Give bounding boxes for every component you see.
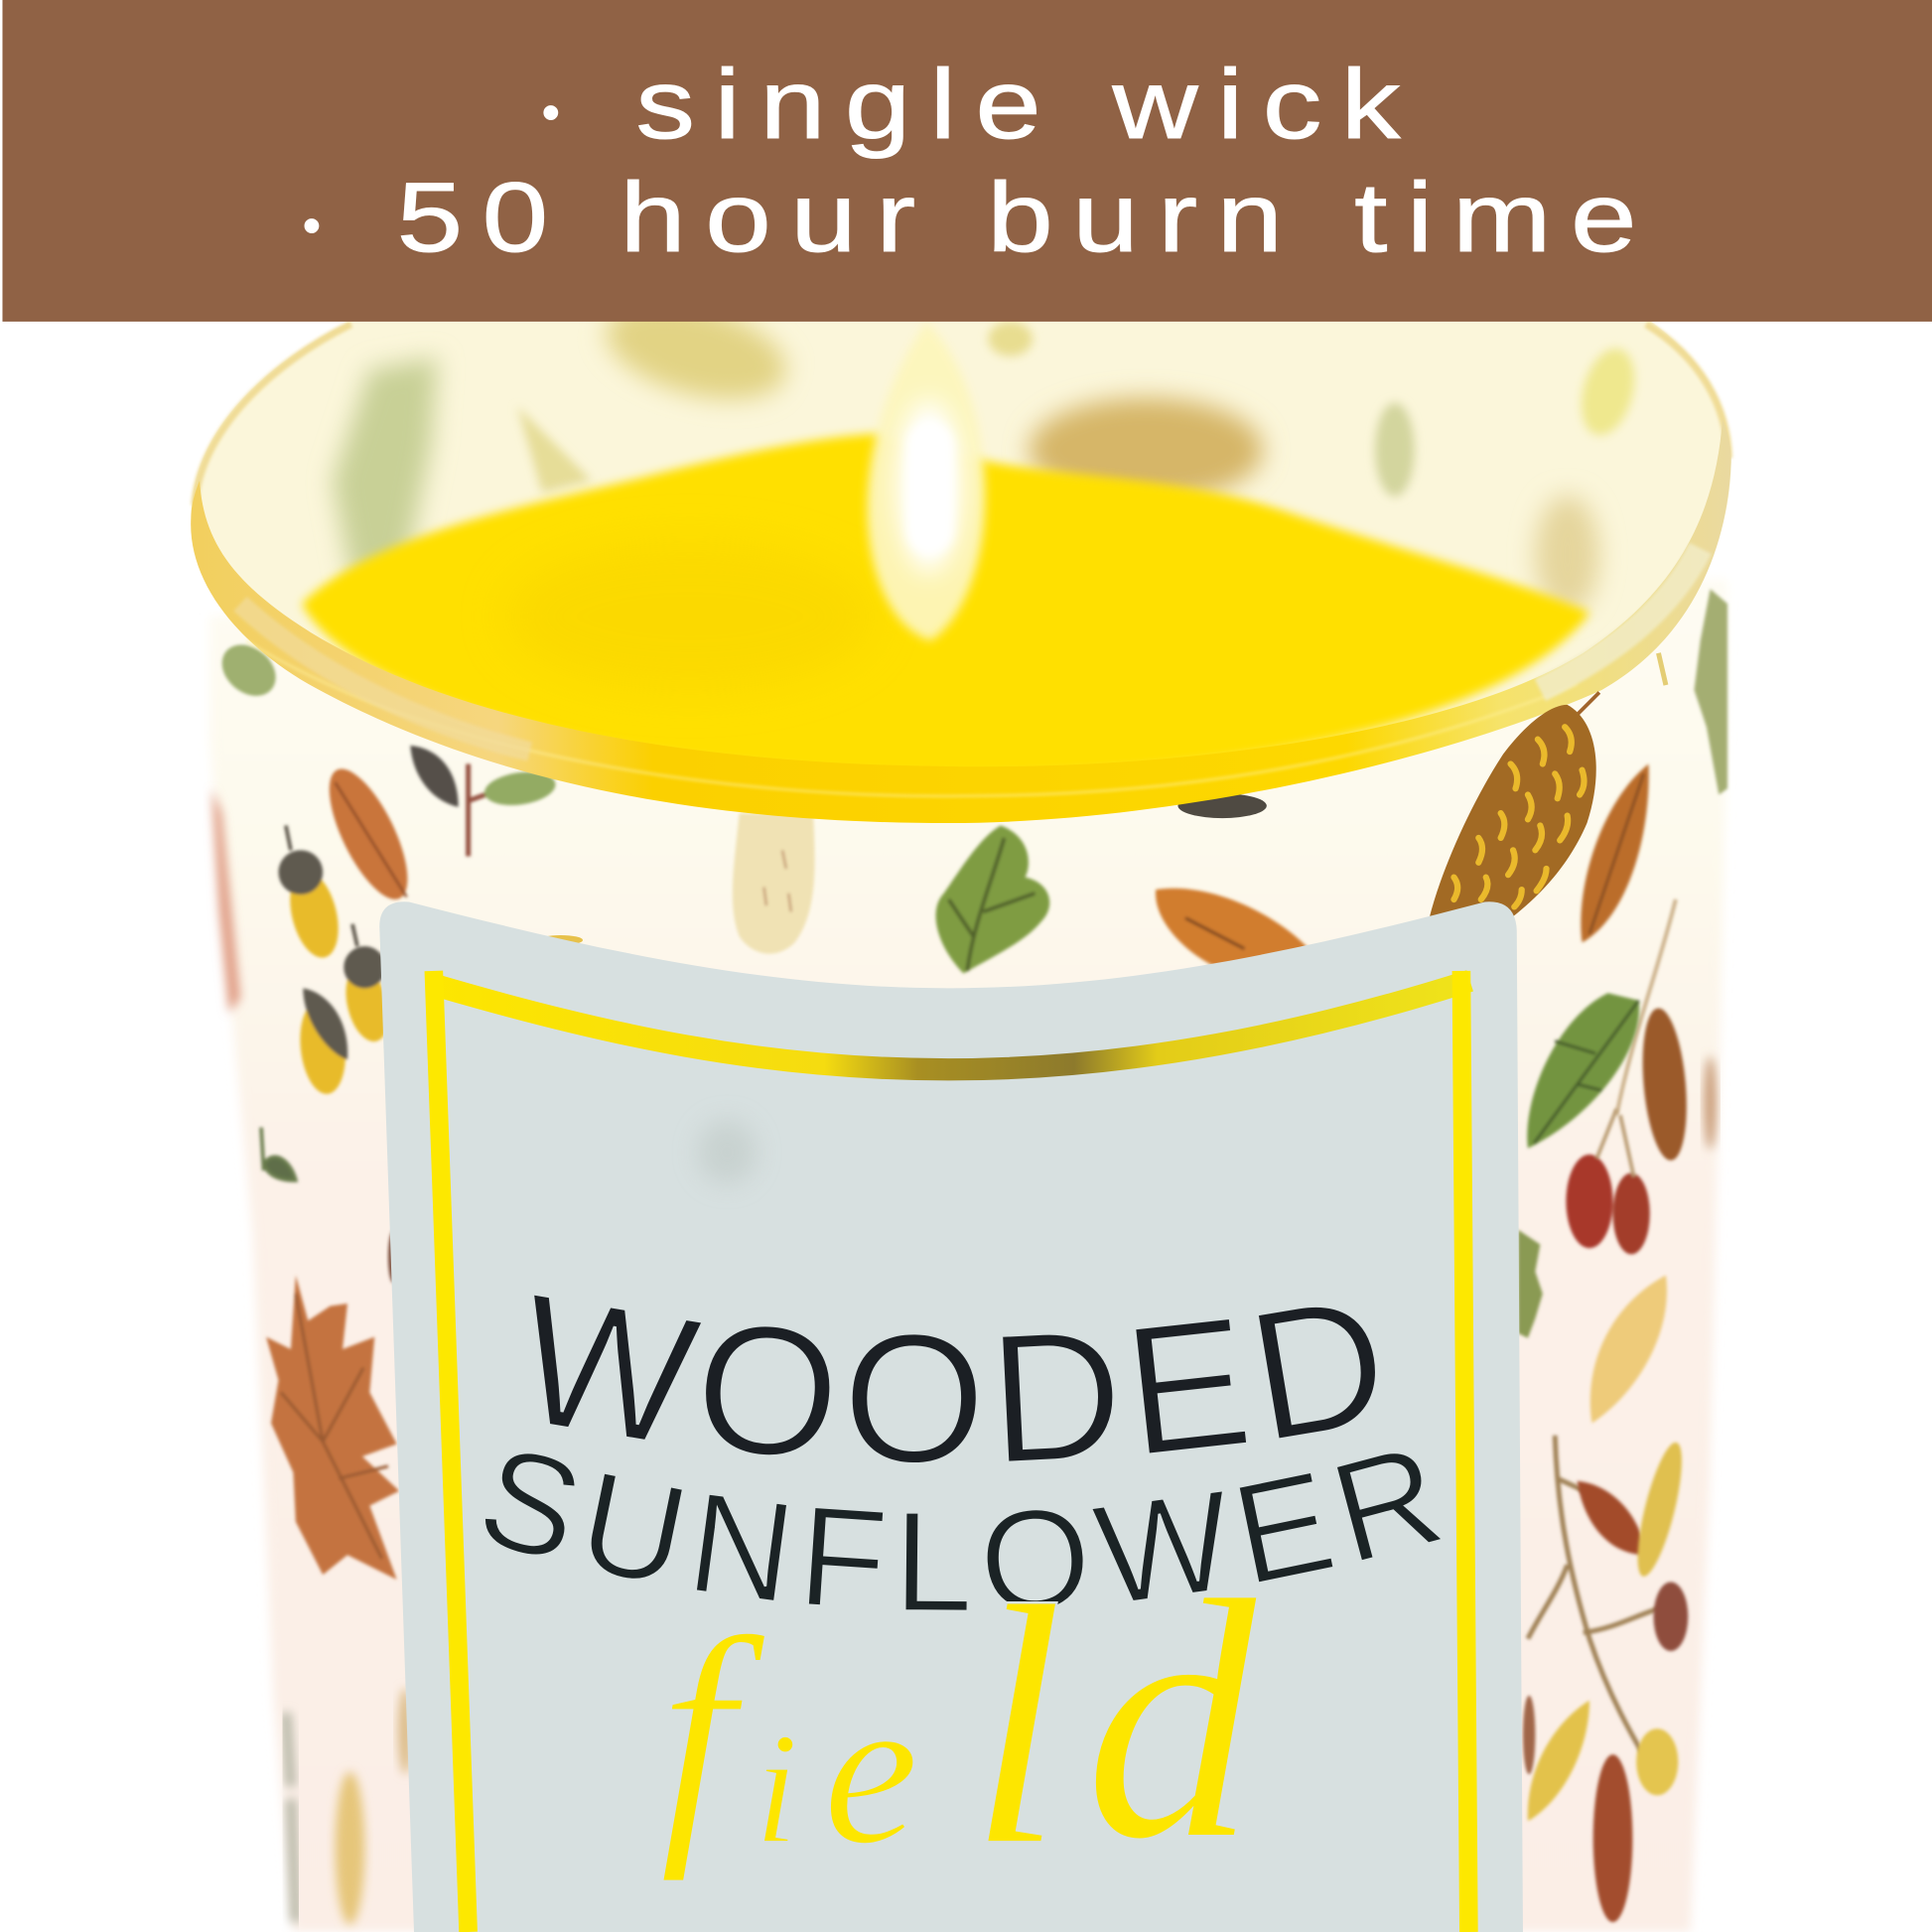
candle jar bbox=[191, 286, 1731, 1932]
blurred green patch bbox=[1375, 403, 1415, 496]
flame streak bbox=[906, 421, 954, 554]
rim pale glass left bbox=[240, 604, 530, 752]
long brown leaf bbox=[1581, 763, 1649, 942]
rim glass bbox=[191, 419, 1731, 823]
gold foil frame top bbox=[429, 981, 1470, 1069]
blurred brown patch bbox=[1029, 398, 1263, 501]
faded yellow leaf bbox=[336, 1772, 364, 1925]
blurred green left bbox=[333, 357, 438, 579]
pale mushroom bbox=[733, 813, 815, 954]
product label bbox=[379, 901, 1523, 1932]
red berries bbox=[1566, 1109, 1650, 1254]
blurred yellow patch bbox=[1573, 343, 1643, 441]
wordmark SUNFLOWER: SUNFLOWER bbox=[484, 1453, 1441, 1610]
rim highlight bbox=[246, 640, 1578, 796]
yellow foil frame sides bbox=[434, 971, 1468, 1932]
flame core bbox=[897, 400, 961, 573]
blurred olive top bbox=[596, 286, 796, 417]
bullet one: • bbox=[541, 82, 560, 143]
orange leaf bbox=[1156, 889, 1311, 966]
dark leaf under rim bbox=[1177, 793, 1267, 818]
twig stem bbox=[1616, 899, 1676, 1115]
dark red leaf bbox=[1654, 1583, 1688, 1651]
interior glass bbox=[191, 322, 1731, 779]
pine cone bbox=[1430, 692, 1599, 924]
header banner bbox=[2, 0, 1932, 322]
script word field: i bbox=[755, 1699, 798, 1876]
pale yellow leaf bbox=[1590, 1276, 1667, 1423]
brown seed leaf bbox=[1637, 1007, 1692, 1163]
brown leaf bbox=[314, 759, 423, 909]
label shadow smudge bbox=[697, 1120, 757, 1184]
blurred olive small bbox=[517, 407, 592, 492]
bullet two: • bbox=[302, 196, 322, 256]
blurred tan patch bbox=[1535, 495, 1599, 614]
faded leaf left of branch bbox=[1523, 1696, 1535, 1774]
green leaf bbox=[1527, 993, 1639, 1149]
faded brown edge leaf bbox=[1704, 1056, 1717, 1150]
faded tan leaf bbox=[398, 1688, 413, 1774]
small green leaf under rim bbox=[212, 634, 286, 706]
feature: 50 hour burn time: 50 hour burn time bbox=[397, 163, 1656, 273]
wax pool bbox=[302, 434, 1589, 776]
red long leaf bbox=[1593, 1754, 1632, 1922]
script word field: e bbox=[823, 1649, 918, 1888]
acorn one bbox=[278, 826, 346, 963]
script word field: l bbox=[968, 1535, 1064, 1917]
dark leaf edge bbox=[388, 1231, 398, 1283]
acorn three bbox=[296, 988, 349, 1096]
jar right side leaves bbox=[1518, 899, 1717, 1922]
script word field: f bbox=[659, 1584, 769, 1883]
label panel bbox=[379, 901, 1523, 1932]
feature: single wick: single wick bbox=[635, 50, 1420, 160]
jar left side leaves bbox=[211, 634, 558, 1925]
dark leaf and twig bbox=[410, 746, 558, 857]
yellow lower leaf bbox=[1528, 1701, 1589, 1821]
jar opening and interior glass bbox=[191, 286, 1731, 823]
yellow slim leaf bbox=[1628, 1439, 1691, 1580]
wax shading bbox=[505, 542, 875, 690]
banner background bbox=[2, 0, 1932, 322]
yellow small leaf bbox=[1636, 1728, 1678, 1795]
inner glass blurred leaves bbox=[333, 286, 1643, 614]
rear rim edge bbox=[195, 324, 1728, 505]
jar front leaves bbox=[538, 589, 1727, 973]
green leaf by label bbox=[1518, 1230, 1543, 1338]
small yellow leaf tip bbox=[538, 935, 583, 945]
branch bbox=[1528, 1436, 1661, 1772]
flame glow bbox=[868, 322, 985, 640]
faded green leaf at right edge bbox=[1694, 589, 1727, 794]
small yellow mark bbox=[1658, 653, 1666, 685]
wordmark WOODED: WOODED bbox=[534, 1295, 1375, 1462]
green oak leaf bbox=[936, 826, 1049, 973]
faded red leaf bbox=[211, 788, 240, 1013]
acorn two bbox=[339, 924, 395, 1046]
script word field: d bbox=[1084, 1529, 1262, 1911]
maple leaf bbox=[266, 1276, 399, 1580]
jar body bbox=[209, 579, 1727, 1932]
rim pale glass right bbox=[1540, 548, 1701, 690]
small sprig bbox=[261, 1128, 296, 1180]
red brown leaf bbox=[1578, 1481, 1646, 1555]
blurred top yellow bbox=[988, 322, 1033, 356]
faded grey marks bbox=[286, 1713, 296, 1922]
